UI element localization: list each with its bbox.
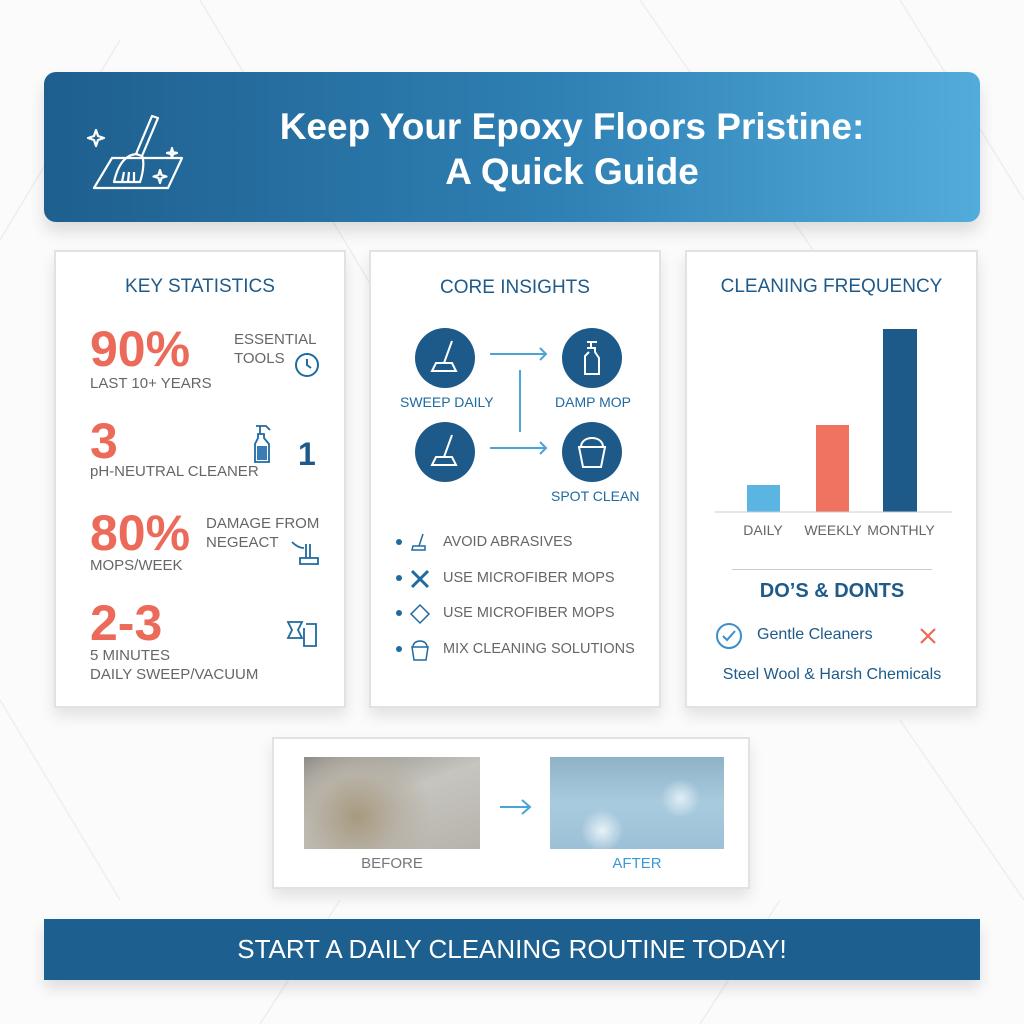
stat 3: pH-NEUTRAL CLEANER — [90, 463, 259, 480]
bullet list: MIX CLEANING SOLUTIONS — [443, 641, 635, 657]
panel: before and after — [272, 737, 750, 889]
stat 80%: MOPS/WEEK — [90, 557, 183, 574]
stat 90%: LAST 10+ YEARS — [90, 375, 212, 392]
bar chart: DAILY — [743, 522, 783, 538]
photo: before — [304, 757, 480, 849]
stat 2-3 — [90, 595, 317, 683]
panel: cleaning frequency — [685, 250, 978, 708]
stat 90%: TOOLS — [234, 350, 285, 367]
flow diagram: DAMP MOP — [555, 394, 631, 410]
footer call to action: START A DAILY CLEANING ROUTINE TODAY! — [237, 934, 787, 964]
do's and donts: Steel Wool & Harsh Chemicals — [723, 666, 941, 683]
bar chart: WEEKLY — [804, 522, 862, 538]
stat 2-3: DAILY SWEEP/VACUUM — [90, 666, 258, 683]
title: Keep Your Epoxy Floors Pristine: — [280, 106, 864, 147]
bullet list: USE MICROFIBER MOPS — [443, 570, 615, 586]
label after: AFTER — [612, 855, 662, 872]
do's and donts: Gentle Cleaners — [757, 626, 873, 643]
bullet list — [396, 534, 635, 661]
heading: KEY STATISTICS — [125, 276, 275, 297]
bar chart — [715, 329, 952, 538]
photo: after — [550, 757, 724, 849]
bullet list: USE MICROFIBER MOPS — [443, 605, 615, 621]
stat 2-3: 2-3 — [90, 595, 162, 651]
heading: CORE INSIGHTS — [440, 277, 590, 298]
do's and donts: DO’S & DONTS — [760, 580, 904, 602]
stat 80% — [90, 505, 319, 574]
flow diagram: SPOT CLEAN — [551, 488, 639, 504]
panel: core insights — [369, 250, 661, 708]
stat 3: 3 — [90, 413, 118, 469]
arrow — [500, 799, 532, 815]
bullet list: AVOID ABRASIVES — [443, 534, 572, 550]
stat 80%: 80% — [90, 505, 190, 561]
flow diagram — [400, 328, 639, 504]
icon: broom — [86, 114, 184, 190]
panel: key statistics — [54, 250, 346, 708]
do's and donts — [716, 580, 941, 683]
header banner — [44, 72, 980, 222]
label before: BEFORE — [361, 855, 423, 872]
stat 2-3: 5 MINUTES — [90, 647, 170, 664]
heading: CLEANING FREQUENCY — [721, 276, 942, 297]
footer call to action — [44, 919, 980, 980]
stat 80%: NEGEACT — [206, 534, 279, 551]
title — [280, 106, 864, 192]
stat 90%: 90% — [90, 321, 190, 377]
flow diagram: SWEEP DAILY — [400, 394, 494, 410]
stat 3: 1 — [298, 436, 316, 472]
bar chart: MONTHLY — [867, 522, 935, 538]
stat 90% — [90, 321, 319, 392]
title: A Quick Guide — [445, 151, 699, 192]
stat 80%: DAMAGE FROM — [206, 515, 319, 532]
stat 90%: ESSENTIAL — [234, 331, 317, 348]
stat 3 — [90, 413, 316, 480]
